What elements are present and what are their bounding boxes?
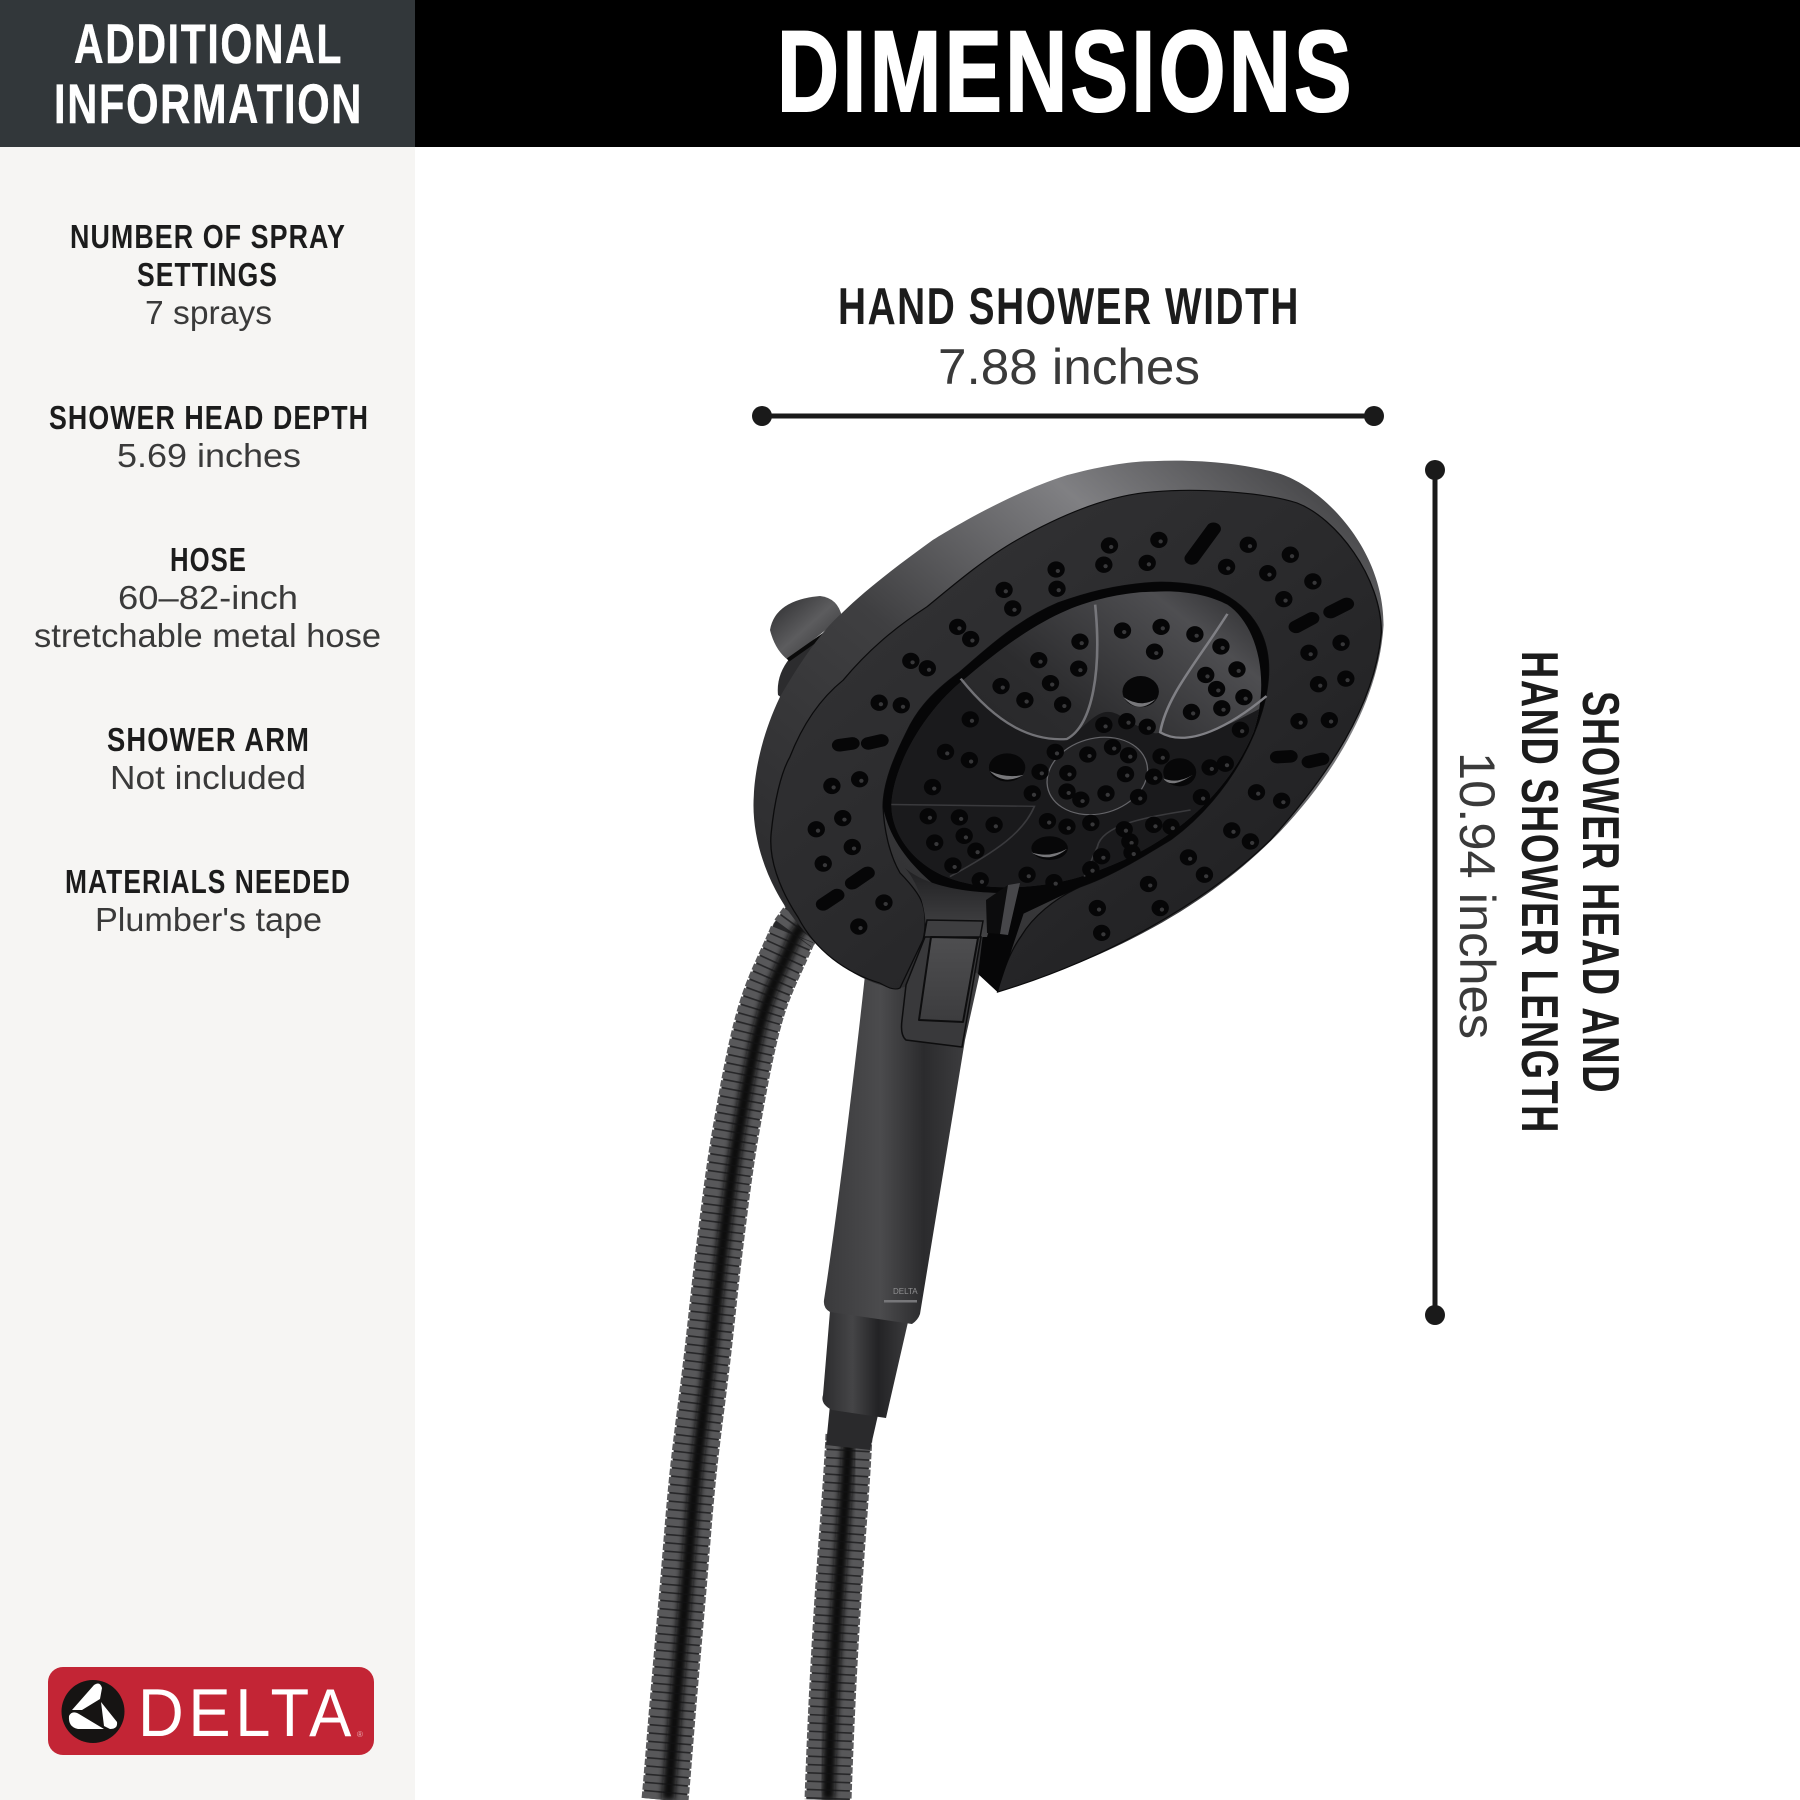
label: shower head and hand shower length: [1449, 651, 1629, 1134]
petal highlight lines: [891, 605, 1266, 877]
product: shower head with hoses: [665, 461, 1384, 1800]
panel: additional information sidebar: [0, 147, 415, 1800]
black gap behind the spray disc: [883, 582, 1269, 992]
text block: materials needed: MATERIALS NEEDED: [65, 863, 351, 900]
text block: number of spray settings: [70, 218, 346, 331]
arrow: width dimension line: [752, 406, 1384, 426]
text block: number of spray settings: SETTINGS: [137, 256, 278, 293]
text block: shower head depth: SHOWER HEAD DEPTH: [49, 399, 369, 436]
heading: additional information: ADDITIONAL: [74, 12, 343, 75]
label: hand shower width: 7.88 inches: [938, 339, 1200, 395]
label: shower head and hand shower length: SHOWER HEAD AND: [1571, 691, 1629, 1094]
header bar: dimensions: [415, 0, 1800, 147]
text block: number of spray settings: NUMBER OF SPRAY: [70, 218, 346, 255]
logo: delta: ®: [357, 1730, 363, 1739]
hose: left: [665, 908, 815, 1800]
logo: delta: DELTA: [138, 1675, 356, 1751]
hand shower handle: [822, 950, 985, 1450]
text block: hose: HOSE: [170, 541, 247, 578]
label: hand shower width: [838, 278, 1300, 395]
inner disc nozzles: [920, 619, 1253, 890]
large spray nozzles: [989, 676, 1196, 860]
text block: number of spray settings: 7 sprays: [145, 294, 272, 331]
shower head: [753, 461, 1384, 992]
label: hand shower width: HAND SHOWER WIDTH: [838, 278, 1300, 336]
text block: materials needed: [65, 863, 351, 938]
head face ring: [771, 490, 1381, 992]
outer ring slot nozzles: [823, 529, 1347, 904]
center spray ring: [1031, 722, 1164, 829]
heading: additional information: INFORMATION: [54, 72, 363, 135]
head back shell: [753, 461, 1384, 992]
header bar: additional information: [0, 0, 415, 147]
release tab: [986, 883, 1020, 935]
heading: additional information: [54, 12, 363, 135]
spray section petals: [892, 682, 1259, 887]
heading: dimensions: DIMENSIONS: [777, 8, 1355, 136]
text block: materials needed: Plumber's tape: [95, 901, 322, 938]
arrow: length dimension line: [1425, 460, 1445, 1325]
text block: shower arm: [107, 721, 310, 796]
text block: shower arm: Not included: [110, 759, 306, 796]
hand shower handle: DELTA: [893, 1287, 918, 1296]
logo: delta: [48, 1667, 374, 1755]
inner spray disc: [891, 591, 1261, 887]
text block: hose: stretchable metal hose: [34, 617, 381, 654]
hose: right: [828, 1435, 849, 1800]
text block: hose: [34, 541, 381, 654]
mount knob: [770, 596, 862, 712]
handle neck and collar: [902, 868, 1000, 1047]
text block: shower arm: SHOWER ARM: [107, 721, 310, 758]
outer ring nozzles: [808, 532, 1355, 941]
label: shower head and hand shower length: HAND SHOWER LENGTH: [1510, 651, 1568, 1134]
label: shower head and hand shower length: 10.94 inches: [1449, 752, 1505, 1039]
text block: shower head depth: [49, 399, 369, 474]
text block: shower head depth: 5.69 inches: [117, 437, 301, 474]
text block: hose: 60–82-inch: [118, 579, 298, 616]
